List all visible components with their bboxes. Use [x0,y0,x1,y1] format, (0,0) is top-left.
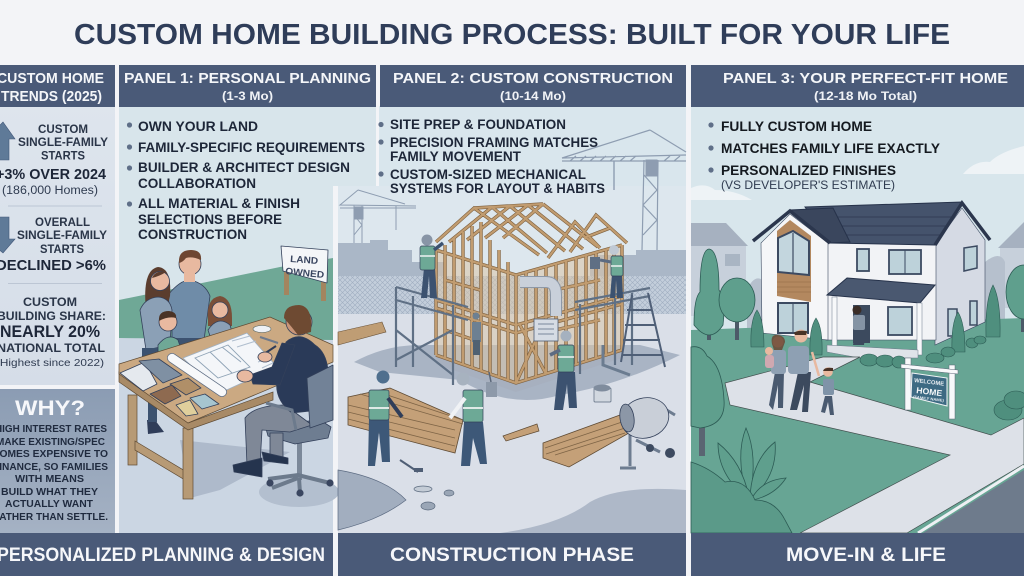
family walking [765,330,834,415]
panel 1 bullet list: COLLABORATION [138,176,256,191]
timber frame house [436,204,627,392]
panel 1 header: PANEL 1: PERSONAL PLANNING [124,70,371,87]
stat: overall single-family starts: STARTS [40,244,84,256]
panel 1 bullet list: ALL MATERIAL & FINISH [138,196,300,211]
seated architect at chair [233,305,334,497]
why heading: WHY? [15,397,85,420]
panel 3 bullet list: MATCHES FAMILY LIFE EXACTLY [721,141,940,156]
why explanation: BUILD WHAT THEY [1,486,98,498]
panel 1 bullet list: BUILDER & ARCHITECT DESIGN [138,160,350,175]
icon: down arrow [0,217,15,253]
worker lifting lumber [450,372,487,466]
why explanation: ACTUALLY WANT [5,498,94,510]
stat: custom single-family starts: SINGLE-FAMILY [18,137,108,149]
tools, bucket and debris [400,372,611,510]
right lumber and loose plank [503,415,629,467]
woman at front door [852,306,866,345]
stat: custom building share [0,297,106,369]
panel 2 bullet list: PRECISION FRAMING MATCHES [390,135,598,150]
house windows and porch [778,231,977,358]
conical shrubs and bushes [751,285,1024,420]
worker inside frame [472,312,481,355]
lawn and floor [119,258,339,533]
family: girl [208,296,232,336]
welcome home sign: WELCOME [914,378,944,388]
panel 1 bullet list: OWN YOUR LAND [138,119,258,134]
left lumber stack [338,322,463,453]
stat: overall single-family starts: SINGLE-FAMILY [17,230,107,242]
land owned sign: OWNED [285,266,325,281]
walkway and sidewalk [725,357,1024,533]
panel 2 bullet list: SITE PREP & FOUNDATION [390,117,566,132]
lawn [691,318,1024,533]
panel 2 bullet list: CUSTOM-SIZED MECHANICAL [390,167,586,182]
stat: custom single-family starts: STARTS [41,150,85,162]
welcome home sign [901,358,958,419]
stat: overall single-family starts [0,217,107,274]
panel 3 header: PANEL 3: YOUR PERFECT-FIT HOME [723,70,1008,87]
panel 3 bullet list: PERSONALIZED FINISHES [721,163,896,178]
sidebar heading: TRENDS (2025) [1,88,102,105]
panel 1 header [119,65,376,107]
planning desk [119,317,333,499]
panel 2 footer: CONSTRUCTION PHASE [390,545,634,566]
scaffolding [396,287,650,385]
background trees [694,249,1024,340]
worker with pipe [550,330,630,410]
panel 3 bullet list: (VS DEVELOPER'S ESTIMATE) [721,180,895,192]
stat: custom building share: CUSTOM [23,297,77,309]
stat: custom building share: BUILDING SHARE: [0,311,106,323]
family: mother [140,267,172,434]
skyline silhouette [338,240,686,300]
land owned sign [281,246,328,301]
ductwork and hvac unit [520,282,558,341]
foreground plants [691,428,792,533]
sidebar heading [0,70,104,105]
family: boy [158,311,182,352]
welcome home sign: HOME [916,385,943,398]
panel 2 bullet list: SYSTEMS FOR LAYOUT & HABITS [390,181,605,196]
panel 3 bullet list [708,119,940,192]
panel: custom home trends sidebar [0,65,115,385]
panel 2 header [380,65,686,107]
neighbouring houses [691,222,1024,330]
panel 3 footer [691,533,1024,576]
stat: custom single-family starts [0,124,108,197]
stat: custom building share: NEARLY 20% [0,323,100,341]
panel 2 bullet list: FAMILY MOVEMENT [390,149,522,164]
panel 2 header: (10-14 Mo) [500,89,566,103]
welcome home sign: (FAMILY NAME) [913,395,945,403]
background cranes [340,130,686,250]
clouds [691,146,1024,200]
panel 1 bullet list: SELECTIONS BEFORE [138,212,282,227]
why explanation: WITH MEANS [15,473,84,485]
panel: why callout [0,389,115,533]
panel 1 footer [0,533,333,576]
worker measuring lumber [368,370,402,466]
panel 2 header: PANEL 2: CUSTOM CONSTRUCTION [393,70,673,87]
why explanation [0,423,108,523]
icon: up arrow [0,122,15,160]
blueprint and roll [172,333,277,393]
house [753,202,990,345]
panel 2 bullet list [378,117,605,196]
panel 3 header [691,65,1024,107]
panel 3 header: (12-18 Mo Total) [814,89,917,103]
worker on left scaffold [420,234,443,298]
panel 2: custom construction [338,65,686,576]
foreground tree [691,347,724,456]
ladder [621,293,665,367]
panel 1 footer: PERSONALIZED PLANNING & DESIGN [0,545,325,566]
panel 1 bullet list: FAMILY-SPECIFIC REQUIREMENTS [138,140,365,155]
panel 1 bullet list [127,119,365,242]
family: father [168,250,210,360]
road [918,466,1024,533]
concrete mixer [617,392,675,468]
fence [338,276,686,316]
panel 1: personal planning [0,65,376,576]
material samples [120,326,278,416]
ground [338,314,686,533]
stat: custom single-family starts: (186,000 Homes) [2,185,98,197]
panel 2 footer [338,533,686,576]
stat: custom single-family starts: CUSTOM [38,124,88,136]
panel 1 bullet list: CONSTRUCTION [138,227,247,242]
stat: overall single-family starts: OVERALL [35,217,90,229]
worker on right scaffold [590,245,623,298]
panel 1 header: (1-3 Mo) [222,89,273,103]
title: CUSTOM HOME BUILDING PROCESS: BUILT FOR YOUR LIFE [74,19,950,51]
panel 3 bullet list: FULLY CUSTOM HOME [721,119,872,134]
panel 3 footer: MOVE-IN & LIFE [786,545,946,566]
panel 3: your perfect-fit home [691,65,1024,576]
sidebar heading: CUSTOM HOME [0,70,104,87]
land owned sign: LAND [290,254,319,267]
